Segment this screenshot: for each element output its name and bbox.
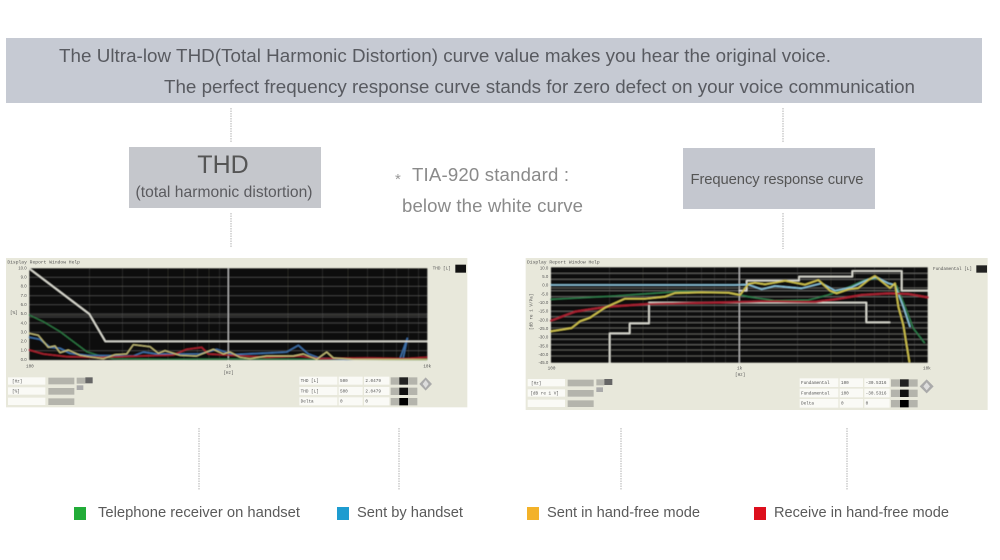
legend label	[433, 265, 466, 273]
plot area	[551, 267, 928, 363]
right controls: 100	[841, 381, 849, 386]
chart panel: frequency response: 1k	[737, 366, 743, 371]
left controls: [dB re 1 V]	[530, 392, 559, 397]
chart panel: frequency response: 100	[548, 366, 556, 371]
left controls: [Hz]	[531, 381, 541, 386]
chart panel: frequency response	[526, 258, 988, 410]
right controls: 0	[340, 400, 343, 405]
label box: Frequency response curve	[683, 148, 875, 209]
legend label: THD [L]	[433, 266, 451, 271]
y axis labels	[18, 265, 27, 362]
y axis labels: 2.0	[21, 339, 27, 344]
y axis labels: 5.0	[21, 311, 27, 316]
legend: Receive in hand-free mode: Receive in hand-free mode	[774, 504, 949, 521]
note: TIA-920 standard: *	[395, 171, 401, 188]
note: TIA-920 standard	[395, 164, 583, 216]
right controls	[299, 377, 432, 405]
label box: Frequency response curve: Frequency response curve	[690, 172, 864, 188]
banner: headline statement	[6, 38, 982, 103]
chart panel: THD: Display Report Window Help	[7, 259, 80, 265]
right controls	[800, 378, 934, 408]
left controls	[8, 377, 93, 405]
legend: Telephone receiver on handset: Telephone receiver on handset	[98, 504, 301, 521]
legend: Sent by handset: Sent by handset	[357, 504, 464, 521]
chart panel: THD: 1k	[226, 364, 232, 369]
left controls: [Hz]	[12, 380, 22, 385]
y axis labels: 3.0	[21, 329, 27, 334]
y axis labels: 0.0	[542, 283, 549, 288]
right controls: THD [L]	[301, 389, 319, 394]
right controls: Fundamental	[801, 381, 830, 386]
y axis labels: 1.0	[21, 348, 27, 353]
chart panel: frequency response: [dB re 1 V/Pa]	[529, 294, 534, 330]
legend label: Fundamental [L]	[933, 267, 972, 272]
right controls: 2.0479	[365, 389, 381, 394]
right controls: Fundamental	[801, 391, 830, 396]
label box: THD	[129, 147, 321, 208]
banner line 1: The Ultra-low THD(Total Harmonic Distortion) curve value makes you hear the original voice.	[59, 45, 831, 66]
right controls: Delta	[801, 402, 814, 407]
y axis labels	[538, 265, 549, 365]
chart panel: THD: 100	[26, 364, 34, 369]
y axis labels: -45.0	[538, 360, 549, 365]
right controls: -30.5316	[866, 391, 887, 396]
left controls: [%]	[12, 390, 20, 395]
chart panel: frequency response: 10k	[923, 366, 931, 371]
chart panel: frequency response: Display Report Window Help	[527, 259, 600, 265]
right controls: -30.5316	[866, 381, 887, 386]
label box: THD: (total harmonic distortion)	[136, 184, 312, 201]
y axis labels: -25.0	[538, 326, 549, 331]
legend: Sent in hand-free mode: Sent in hand-free mode	[547, 504, 700, 521]
y axis labels: -15.0	[538, 309, 549, 314]
right controls: 0	[866, 402, 869, 407]
right controls: 0	[365, 400, 368, 405]
right controls: 0	[841, 402, 844, 407]
y axis labels: 10.0	[18, 265, 27, 270]
right controls: Delta	[301, 400, 314, 405]
y axis labels: 5.0	[542, 274, 549, 279]
y axis labels: 7.0	[21, 293, 27, 298]
label box: THD: THD	[197, 151, 249, 179]
y axis labels: -30.0	[538, 335, 549, 340]
plot area	[29, 268, 427, 360]
legend label	[933, 265, 987, 273]
chart panel: THD	[6, 258, 467, 407]
y axis labels: 0.0	[21, 357, 27, 362]
note: TIA-920 standard: TIA-920 standard :	[412, 164, 569, 185]
y axis labels: 6.0	[21, 302, 27, 307]
chart panel: THD: [%]	[10, 311, 18, 316]
y axis labels: 8.0	[21, 284, 27, 289]
right controls: 2.0479	[365, 379, 381, 384]
right controls: THD [L]	[301, 379, 319, 384]
y axis labels: -20.0	[538, 317, 549, 322]
note: TIA-920 standard: below the white curve	[402, 195, 583, 216]
chart panel: THD: [Hz]	[223, 371, 234, 376]
y axis labels: -40.0	[538, 352, 549, 357]
y axis labels: 4.0	[21, 320, 27, 325]
y axis labels: 10.0	[540, 265, 549, 270]
y axis labels: -5.0	[541, 291, 549, 296]
y axis labels: 9.0	[21, 275, 27, 280]
chart panel: THD: 10k	[423, 364, 432, 369]
chart panel: frequency response: [Hz]	[735, 373, 745, 378]
right controls: 100	[841, 391, 849, 396]
banner line 2: The perfect frequency response curve stands for zero defect on your voice communication	[164, 76, 915, 97]
left controls	[528, 379, 612, 407]
y axis labels: -10.0	[538, 300, 549, 305]
right controls: 500	[340, 379, 348, 384]
y axis labels: -35.0	[538, 343, 549, 348]
right controls: 500	[340, 389, 348, 394]
